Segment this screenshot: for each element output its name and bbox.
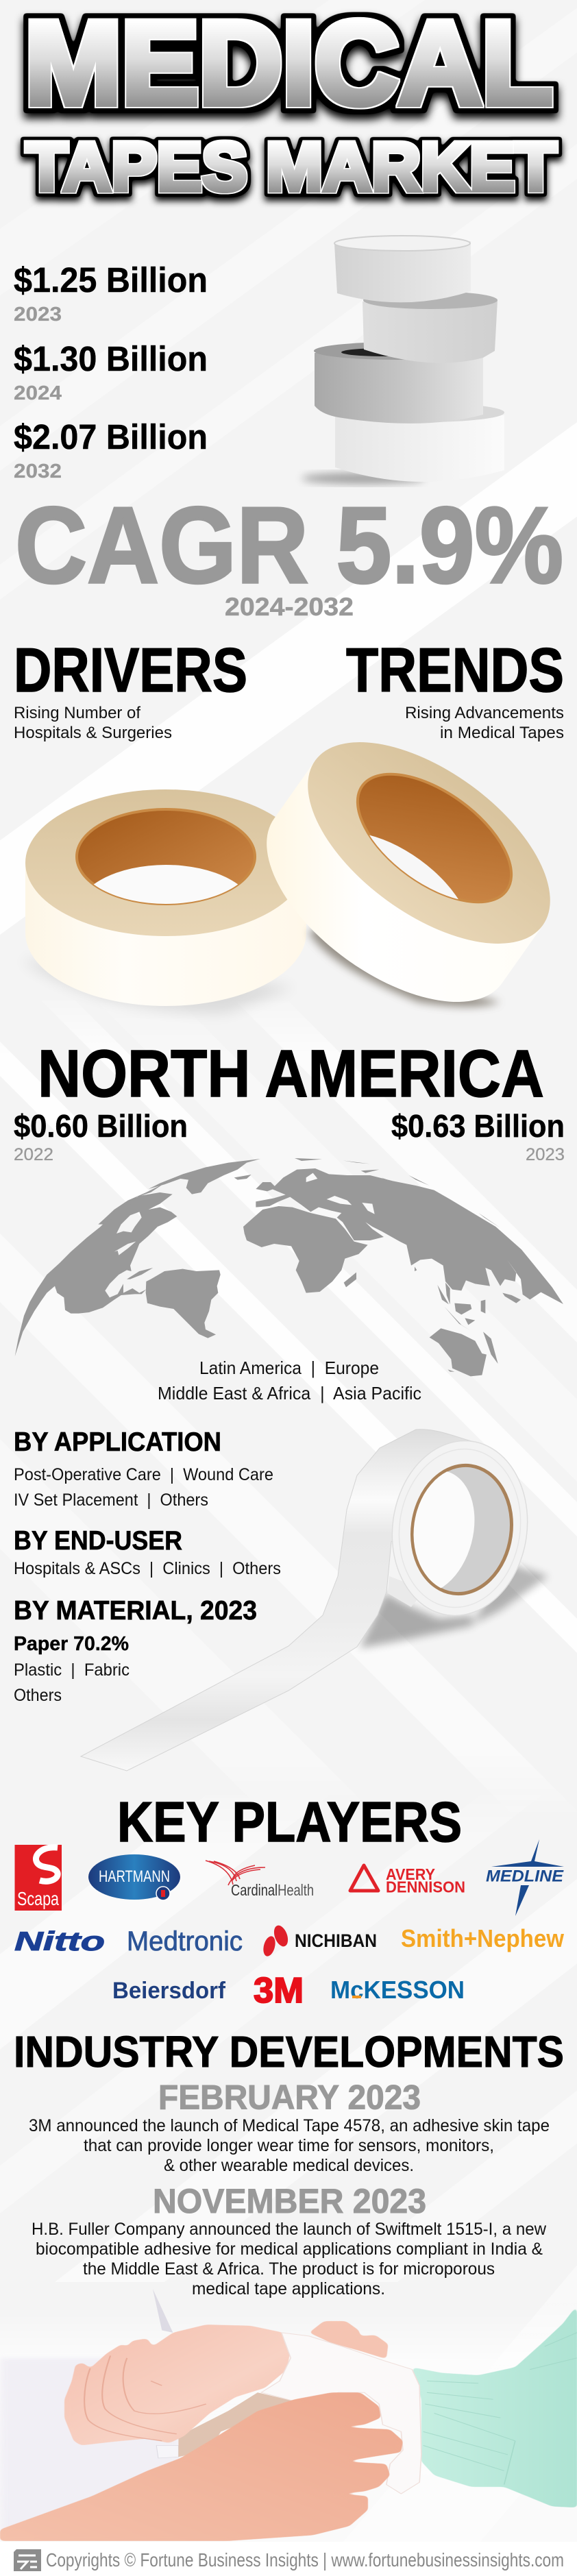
logo: medline: MEDLINE — [486, 1867, 564, 1886]
development: november 2023 — [32, 2182, 547, 2298]
development: february 2023 — [29, 2078, 550, 2175]
development: february 2023: 3M announced the launch of Medical Tape 4578, an adhesive skin tape — [29, 2116, 550, 2135]
market size values: $1.25 Billion — [14, 260, 208, 299]
logo: smith and nephew: Smith+Nephew — [401, 1924, 565, 1952]
development: february 2023: FEBRUARY 2023 — [158, 2078, 421, 2116]
drivers: Hospitals & Surgeries — [14, 724, 172, 742]
by material: Others — [14, 1686, 62, 1705]
by material: Paper 70.2% — [14, 1633, 129, 1655]
heading: key players: KEY PLAYERS — [117, 1790, 462, 1854]
by end-user — [14, 1526, 281, 1578]
by application: BY APPLICATION — [14, 1427, 221, 1457]
market size values: $1.30 Billion — [14, 339, 208, 378]
logo: avery dennison — [350, 1865, 465, 1896]
logo: scapa: Scapa — [17, 1888, 59, 1909]
drivers: Rising Number of — [14, 704, 140, 722]
logo: cardinal health: CardinalHealth — [231, 1881, 314, 1899]
world map — [15, 1158, 563, 1376]
logo: scapa — [15, 1845, 62, 1911]
market size values — [14, 260, 208, 482]
by end-user: BY END-USER — [14, 1526, 182, 1556]
logo: medtronic: Medtronic — [127, 1926, 243, 1956]
regional values: 2023 — [526, 1145, 565, 1164]
illustration: two cream tape rolls — [25, 742, 550, 1016]
illustration: stack of tape rolls — [302, 236, 504, 484]
regional values: $0.63 Billion — [391, 1108, 565, 1144]
drivers: DRIVERS — [14, 636, 247, 705]
logo: nichiban: NICHIBAN — [295, 1930, 377, 1951]
other regions — [158, 1358, 421, 1403]
regional values: 2022 — [14, 1145, 53, 1164]
market size values: 2023 — [14, 304, 62, 326]
by application: Post-Operative Care | Wound Care — [14, 1465, 273, 1484]
logo: mckesson: McKESSON — [330, 1976, 465, 2004]
by application: IV Set Placement | Others — [14, 1491, 208, 1510]
logo: 3m: 3M — [254, 1971, 304, 2011]
title — [25, 0, 556, 206]
development: february 2023: & other wearable medical devices. — [164, 2156, 414, 2175]
by application — [14, 1427, 273, 1510]
by material — [14, 1596, 257, 1705]
footer — [0, 2542, 577, 2576]
logo: nitto: Nitto — [14, 1927, 105, 1956]
logo: hartmann — [88, 1854, 180, 1900]
market size values: 2024 — [14, 382, 62, 404]
regional values: $0.60 Billion — [14, 1108, 188, 1144]
logo: avery dennison: DENNISON — [386, 1878, 465, 1896]
logo: cardinal health — [206, 1861, 314, 1899]
trends — [346, 636, 564, 742]
other regions: Middle East & Africa | Asia Pacific — [158, 1383, 421, 1403]
by material: BY MATERIAL, 2023 — [14, 1596, 257, 1626]
drivers — [14, 636, 247, 742]
market size values: $2.07 Billion — [14, 417, 208, 456]
logo: avery dennison: AVERY — [386, 1865, 435, 1883]
logo: nichiban — [261, 1924, 377, 1958]
logo: medline — [486, 1839, 564, 1916]
development: november 2023: medical tape applications. — [192, 2279, 385, 2298]
other regions: Latin America | Europe — [199, 1358, 379, 1378]
regional values — [14, 1108, 565, 1164]
development: november 2023: biocompatible adhesive for medical applications compliant in India & — [36, 2240, 543, 2259]
background with diagonal bands — [0, 422, 577, 1653]
illustration: white tape roll — [81, 1430, 548, 1771]
trends: Rising Advancements — [405, 704, 564, 722]
market size values: 2032 — [14, 461, 62, 482]
title: TAPES MARKET — [26, 129, 556, 206]
title: MEDICAL — [25, 0, 552, 129]
by material: Plastic | Fabric — [14, 1660, 130, 1680]
logos — [14, 1839, 565, 2011]
trends: in Medical Tapes — [440, 724, 564, 742]
logo: beiersdorf: Beiersdorf — [112, 1978, 226, 2004]
CAGR figure: 2024-2032 — [225, 593, 354, 621]
illustration: hands bandaging a wrist — [0, 2289, 577, 2542]
development: november 2023: NOVEMBER 2023 — [153, 2182, 426, 2220]
development: november 2023: the Middle East & Africa. The product is for microporous — [83, 2259, 495, 2279]
development: november 2023: H.B. Fuller Company announced the launch of Swiftmelt 1515-I, a new — [32, 2220, 547, 2239]
development: february 2023: that can provide longer wear time for sensors, monitors, — [84, 2136, 494, 2155]
by end-user: Hospitals & ASCs | Clinics | Others — [14, 1559, 281, 1578]
icon: fortune business insights logo — [14, 2549, 41, 2571]
logo: hartmann: HARTMANN — [99, 1867, 170, 1886]
